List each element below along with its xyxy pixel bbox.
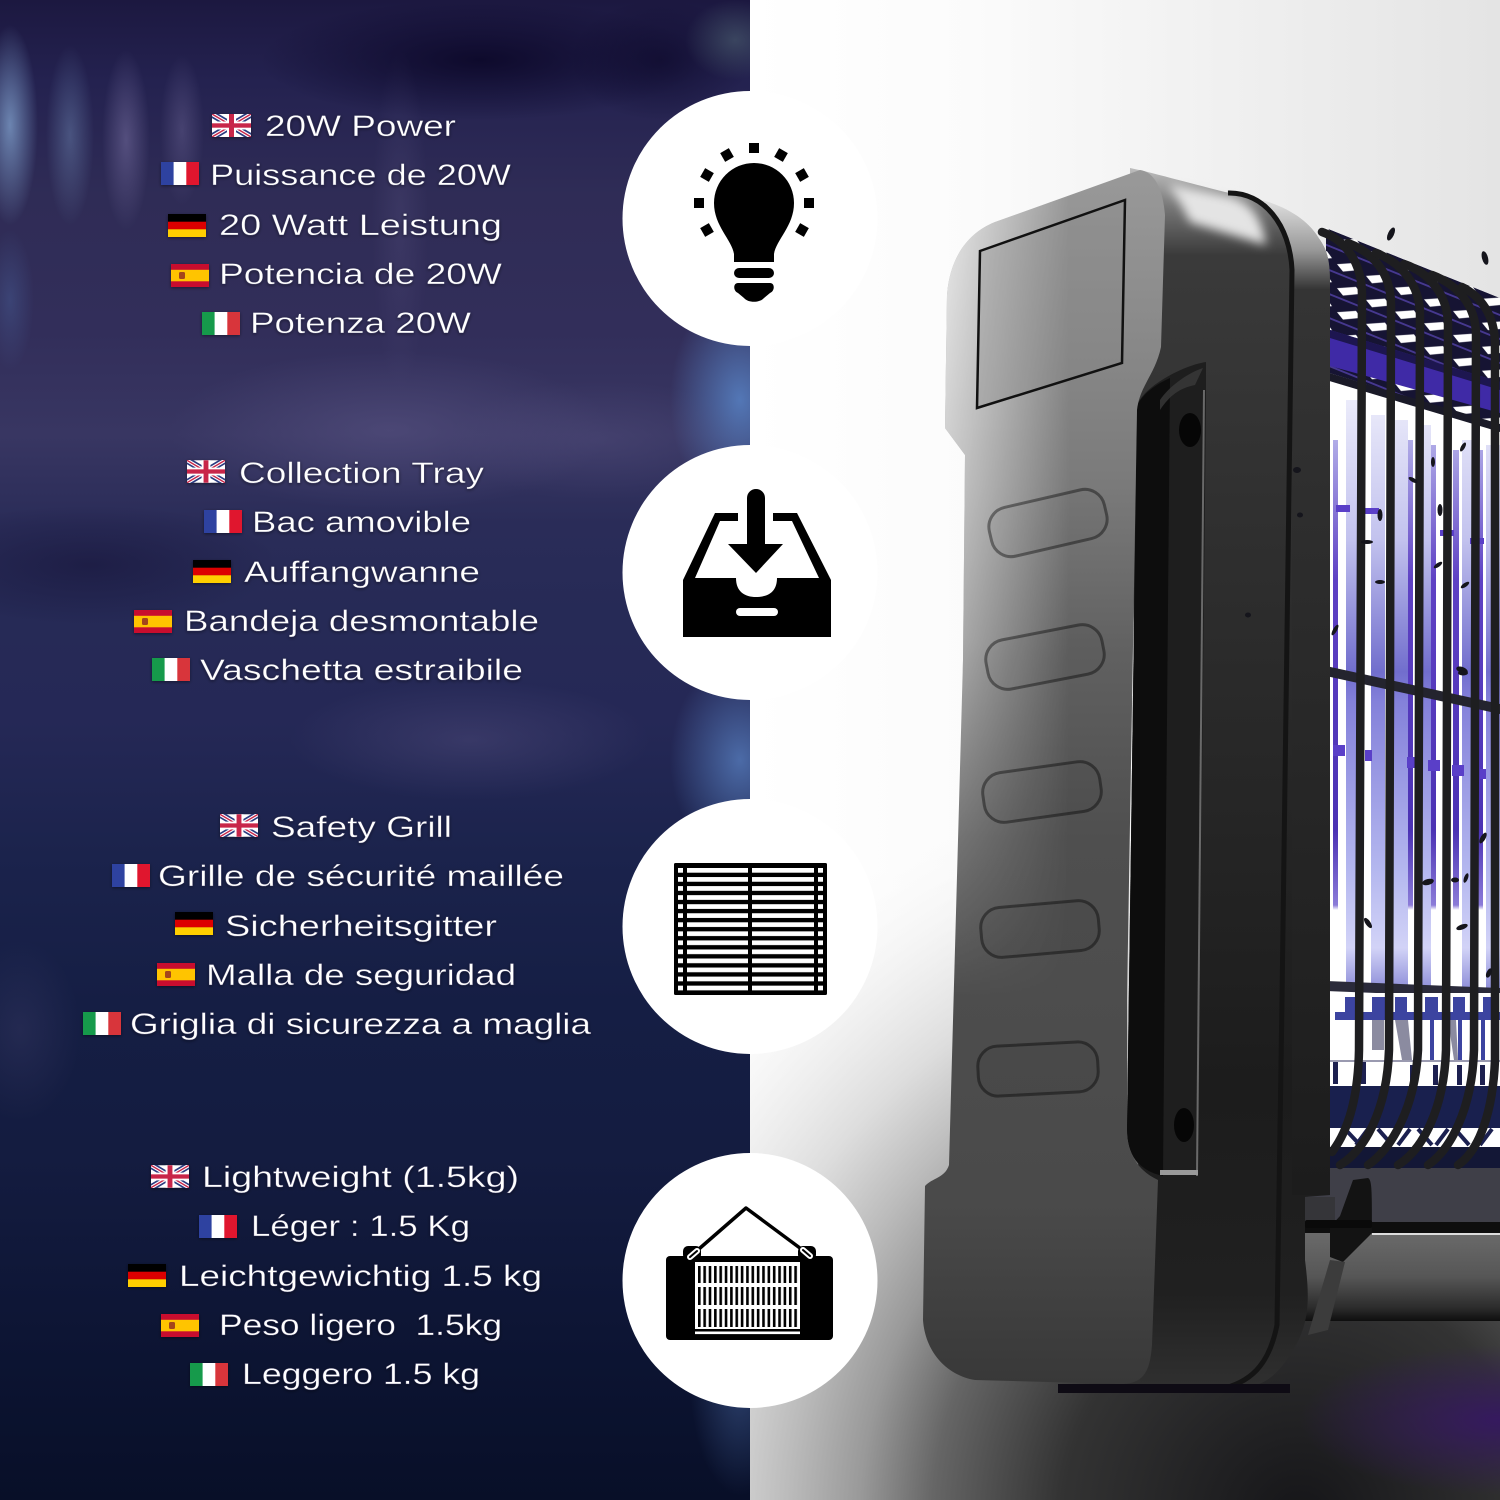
bracket hook [1305, 1178, 1372, 1335]
line: English: Collection Tray [239, 457, 484, 490]
icon badge: safety grill [622, 799, 878, 1054]
line: English: 20W Power [265, 110, 456, 143]
cylinder stand [1295, 1233, 1500, 1321]
line: German [168, 209, 502, 242]
grill rails [1326, 666, 1500, 714]
line: German [193, 556, 480, 589]
louvre top [1326, 228, 1500, 425]
purple cross bars [1333, 505, 1486, 779]
icon badge: collection tray [622, 445, 878, 700]
feature block: collection tray [134, 457, 539, 687]
insects [1245, 226, 1493, 979]
icon badge: hanging lightweight device [622, 1153, 878, 1408]
line: French: Puissance de 20W [210, 159, 512, 192]
line: French [204, 506, 471, 539]
line: French: Bac amovible [252, 506, 471, 539]
line: Spanish [171, 258, 503, 291]
line: English [220, 811, 452, 844]
line: German: Auffangwanne [244, 556, 480, 589]
line: French: Léger : 1.5 Kg [251, 1210, 470, 1243]
line: English [212, 110, 456, 143]
front face [923, 170, 1165, 1384]
side top highlight [1168, 184, 1266, 245]
line: Spanish: Peso ligero 1.5kg [219, 1309, 502, 1342]
wire guards [1322, 232, 1495, 1165]
line: English [151, 1161, 519, 1194]
line: German: Sicherheitsgitter [225, 910, 497, 943]
lower lamp section [1326, 993, 1500, 1088]
feature block: lightweight [128, 1161, 542, 1391]
rear rim groove [1225, 193, 1292, 1388]
background: blurred dark left panel [0, 0, 810, 1500]
line: French: Grille de sécurité maillée [158, 860, 564, 893]
rear rim panel [1262, 200, 1330, 1195]
line: Spanish: Malla de seguridad [206, 959, 516, 992]
icon badge: light bulb [622, 91, 878, 346]
line: Italian: Griglia di sicurezza a maglia [130, 1008, 591, 1041]
handle recess [1127, 362, 1206, 1178]
line: English [187, 457, 484, 490]
line: German [175, 910, 497, 943]
lamp cage interior [1295, 228, 1500, 1234]
line: German: 20 Watt Leistung [219, 209, 502, 242]
side of body [1130, 168, 1330, 1390]
lower panel [1295, 1168, 1500, 1222]
product photo: insect killer device [923, 168, 1500, 1393]
label plate [977, 200, 1125, 408]
line: Spanish: Bandeja desmontable [184, 605, 539, 638]
line: Italian [202, 307, 472, 340]
line: Italian: Vaschetta estraibile [200, 654, 523, 687]
line: English: Safety Grill [271, 811, 452, 844]
line: English: Lightweight (1.5kg) [202, 1161, 519, 1194]
ribs [977, 485, 1111, 1097]
line: German: Leichtgewichtig 1.5 kg [179, 1260, 542, 1293]
line: Italian [190, 1358, 480, 1391]
rubber feet [1058, 1384, 1290, 1393]
line: Spanish: Potencia de 20W [219, 258, 503, 291]
feature block: safety grill [83, 811, 591, 1041]
line: Italian [152, 654, 523, 687]
background: bright right panel with dark floor [750, 0, 1500, 1500]
line: Italian: Leggero 1.5 kg [242, 1358, 480, 1391]
feature block: power [161, 110, 512, 340]
line: Italian: Potenza 20W [250, 307, 472, 340]
glowing tube area [1330, 381, 1500, 993]
line: French [199, 1210, 470, 1243]
